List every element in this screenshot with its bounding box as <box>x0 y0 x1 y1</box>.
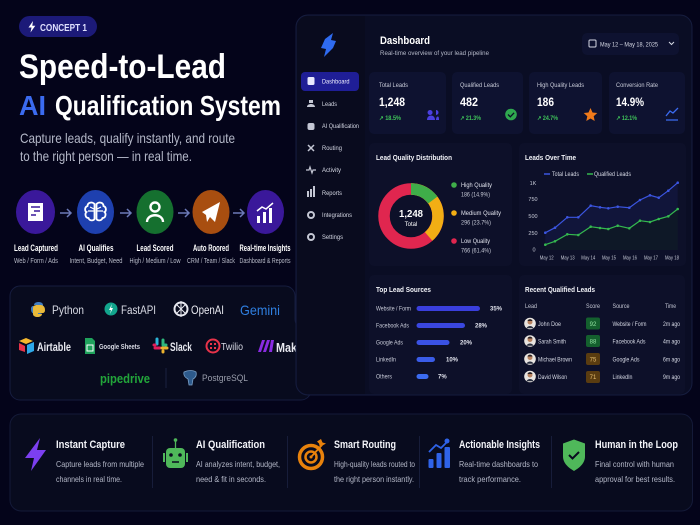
table header: Lead <box>525 304 537 310</box>
feature: instant capture: Capture leads from multiple <box>56 459 144 469</box>
table header: Time <box>665 304 677 310</box>
panel: lead quality distribution: Lead Quality Distribution <box>376 153 452 162</box>
feature: actionable insights: track performance. <box>459 474 521 484</box>
step: lead scored: High / Medium / Low <box>130 256 181 265</box>
stat card: qualified leads: Qualified Leads <box>460 82 499 89</box>
nav: dashboard <box>301 72 359 91</box>
table header: Score <box>586 304 601 310</box>
row: john doe: 92 <box>590 322 597 328</box>
feature: smart routing: the right person instantly. <box>334 474 414 484</box>
chart legend: Qualified Leads <box>594 172 631 178</box>
row: david wilson: LinkedIn <box>612 375 632 381</box>
row: john doe: 2m ago <box>663 322 681 328</box>
row: sarah smith: 4m ago <box>663 340 681 346</box>
legend: medium quality: Medium Quality <box>461 211 501 217</box>
feature: instant capture: Instant Capture <box>56 439 125 451</box>
panel: features <box>10 414 692 511</box>
arrow <box>60 209 71 217</box>
panel: tech stack <box>10 286 311 400</box>
logo: make: Make <box>276 341 303 355</box>
row: david wilson <box>524 371 681 383</box>
badge: concept 1 <box>19 16 97 37</box>
panel: dashboard <box>296 15 692 395</box>
nav: ai qualification <box>308 123 359 130</box>
line chart: May 15 <box>602 256 616 262</box>
nav: reports <box>307 186 342 197</box>
row: sarah smith <box>524 335 681 347</box>
title: Speed-to-Lead <box>19 48 226 86</box>
legend: medium quality <box>451 210 501 226</box>
bar: website / form: Website / Form <box>376 306 411 312</box>
legend: high quality <box>451 182 492 198</box>
stat card: conversion rate: ↗ 12.1% <box>616 116 638 122</box>
stat card: total leads: Total Leads <box>379 82 408 89</box>
nav: leads: Leads <box>322 102 337 108</box>
nav: leads <box>307 100 337 108</box>
bar: google ads: 20% <box>460 340 473 346</box>
subtitle: to the right person — in real time. <box>20 148 192 164</box>
nav: settings: Settings <box>322 235 343 241</box>
logo: pipedrive: pipedrive <box>100 371 150 386</box>
stat card: total leads: 1,248 <box>379 95 405 109</box>
line chart <box>528 181 679 262</box>
chart legend <box>544 172 631 178</box>
stat card: high quality leads: ↗ 24.7% <box>537 116 559 122</box>
nav: routing: Routing <box>322 146 342 152</box>
step: lead captured: Lead Captured <box>14 243 58 253</box>
legend: high quality: 186 (14.9%) <box>461 192 490 198</box>
bar: facebook ads <box>376 323 488 330</box>
bar: others: Others <box>376 374 392 380</box>
line chart: May 18 <box>665 256 679 262</box>
nav: dashboard: Dashboard <box>322 80 350 86</box>
logo: python <box>31 302 84 317</box>
row: michael brown <box>524 353 681 365</box>
line chart: May 14 <box>581 256 595 262</box>
donut chart: 1,248 <box>399 208 423 220</box>
title <box>19 48 281 121</box>
legend: medium quality: 296 (23.7%) <box>461 220 491 226</box>
legend: low quality: 766 (61.4%) <box>461 248 491 254</box>
row: sarah smith: Sarah Smith <box>538 340 566 346</box>
line chart: 250 <box>528 231 538 237</box>
panel: leads over time: Leads Over Time <box>525 153 576 162</box>
line chart: 0 <box>532 248 536 254</box>
sidebar logo <box>321 33 336 57</box>
step: ai qualifies: Intent, Budget, Need <box>70 256 122 265</box>
step: real-time insights <box>240 190 291 265</box>
bar: others: 7% <box>438 374 447 380</box>
feature: smart routing <box>300 439 415 484</box>
logo: twilio <box>206 340 243 353</box>
feature: ai qualification <box>163 438 280 484</box>
panel: top lead sources: Top Lead Sources <box>376 285 431 294</box>
dashboard header: Dashboard <box>380 35 430 47</box>
step: ai qualifies <box>70 190 122 265</box>
line chart: May 12 <box>540 256 554 262</box>
nav: routing <box>308 145 342 152</box>
row: john doe <box>524 318 681 330</box>
stat card: high quality leads: 186 <box>537 95 554 109</box>
step: auto routed: Auto Roored <box>193 243 229 253</box>
arrow <box>120 209 131 217</box>
logo: postgresql: PostgreSQL <box>202 373 248 384</box>
table header <box>525 304 677 310</box>
bar: website / form <box>376 306 503 312</box>
nav: ai qualification: AI Qualification <box>322 124 359 130</box>
logo: google sheets <box>85 338 140 354</box>
chart legend: Total Leads <box>552 172 579 178</box>
row: david wilson: 71 <box>590 375 597 381</box>
row: michael brown: 75 <box>590 358 597 364</box>
bar: linkedin: 10% <box>446 358 459 364</box>
dashboard header <box>380 35 489 57</box>
bar: facebook ads: 28% <box>475 324 488 330</box>
line chart: 750 <box>528 197 538 203</box>
line chart: May 16 <box>623 256 637 262</box>
donut chart <box>384 189 438 243</box>
feature: ai qualification: AI Qualification <box>196 439 265 451</box>
logo: python: Python <box>52 303 84 317</box>
line chart: 500 <box>528 214 538 220</box>
line chart: May 17 <box>644 256 658 262</box>
step: auto routed: CRM / Team / Slack <box>187 256 235 265</box>
row: david wilson: 9m ago <box>663 375 681 381</box>
nav: integrations <box>308 212 352 219</box>
nav: reports: Reports <box>322 191 342 197</box>
step: ai qualifies: AI Qualifies <box>78 243 114 253</box>
feature: smart routing: Smart Routing <box>334 439 396 451</box>
panel: leads over time <box>519 143 686 266</box>
step: real-time insights: Dashboard & Reports <box>240 256 291 265</box>
legend: low quality <box>451 238 491 254</box>
stat card: qualified leads: ↗ 21.3% <box>460 116 482 122</box>
process flow <box>14 190 291 265</box>
feature: instant capture: channels in real time. <box>56 474 122 484</box>
row: michael brown: Google Ads <box>612 358 640 364</box>
bar: linkedin <box>376 357 459 364</box>
logo: gemini: Gemini <box>240 302 280 318</box>
logo: openai <box>174 301 224 317</box>
bar: linkedin: LinkedIn <box>376 358 396 364</box>
stat card: conversion rate: 14.9% <box>616 95 644 109</box>
feature: ai qualification: AI analyzes intent, budget, <box>196 459 280 469</box>
feature: human in the loop: Final control with human <box>595 459 674 469</box>
feature: actionable insights: Actionable Insights <box>459 439 540 451</box>
bar: others <box>376 374 447 380</box>
feature: actionable insights <box>428 438 540 484</box>
logo: fastapi: FastAPI <box>121 305 156 317</box>
nav: settings <box>308 234 343 241</box>
step: lead captured: Web / Form / Ads <box>14 256 58 265</box>
badge: concept 1: CONCEPT 1 <box>40 23 87 34</box>
feature: smart routing: High-quality leads routed to <box>334 459 415 469</box>
step: lead scored <box>130 190 181 265</box>
bar: google ads: Google Ads <box>376 340 403 346</box>
panel: recent qualified leads: Recent Qualified Leads <box>525 285 595 294</box>
panel: lead quality distribution <box>369 143 512 266</box>
step: real-time insights: Real-time Insights <box>240 243 290 253</box>
logo: airtable: Airtable <box>37 342 71 354</box>
row: sarah smith: Facebook Ads <box>612 340 646 346</box>
row: sarah smith: 88 <box>590 340 597 346</box>
stat card: total leads <box>369 72 446 134</box>
bar: facebook ads: Facebook Ads <box>376 324 409 330</box>
nav: integrations: Integrations <box>322 213 352 219</box>
logo: airtable <box>19 338 71 354</box>
step: auto routed <box>187 190 235 265</box>
date picker: May 12 – May 18, 2025 <box>600 42 658 48</box>
line chart: 1K <box>530 181 537 187</box>
feature: actionable insights: Real-time dashboards to <box>459 459 538 469</box>
step: lead captured <box>14 190 58 265</box>
row: michael brown: Michael Brown <box>538 358 572 364</box>
line chart: May 13 <box>561 256 575 262</box>
arrow <box>233 209 244 217</box>
legend: low quality: Low Quality <box>461 239 490 245</box>
logo: fastapi <box>104 302 156 317</box>
feature: ai qualification: need & fit in seconds. <box>196 474 266 484</box>
row: john doe: Website / Form <box>612 322 646 328</box>
donut chart: Total <box>405 222 417 228</box>
dashboard header: Real-time overview of your lead pipeline <box>380 50 489 57</box>
logo: google sheets: Google Sheets <box>99 342 140 351</box>
subtitle: Capture leads, qualify instantly, and route <box>20 130 235 146</box>
row: david wilson: David Wilson <box>538 375 567 381</box>
row: john doe: John Doe <box>538 322 562 328</box>
stat card: high quality leads <box>529 72 602 134</box>
logo: postgresql <box>184 370 248 385</box>
date picker <box>582 33 679 55</box>
bar: website / form: 35% <box>490 306 503 312</box>
logo: make <box>258 340 303 355</box>
feature: instant capture <box>25 438 144 484</box>
logo: slack: Slack <box>170 342 192 354</box>
feature: human in the loop: approval for best results. <box>595 474 675 484</box>
panel: recent qualified leads <box>519 275 685 394</box>
subtitle <box>20 130 235 164</box>
table header: Source <box>612 304 630 310</box>
legend: high quality: High Quality <box>461 183 492 189</box>
stat card: high quality leads: High Quality Leads <box>537 82 584 89</box>
stat card: conversion rate <box>609 72 685 134</box>
stat card: total leads: ↗ 18.5% <box>379 116 402 122</box>
nav: activity <box>306 167 341 174</box>
step: lead scored: Lead Scored <box>136 243 174 253</box>
logo: openai: OpenAI <box>191 305 224 317</box>
stat card: qualified leads: 482 <box>460 95 478 109</box>
stat card: qualified leads <box>452 72 523 134</box>
title: AI <box>19 90 46 121</box>
feature: human in the loop <box>563 439 678 484</box>
stat card: conversion rate: Conversion Rate <box>616 82 659 89</box>
panel: top lead sources <box>369 275 512 394</box>
title: Qualification System <box>55 90 281 121</box>
nav: activity: Activity <box>322 168 341 174</box>
row: michael brown: 6m ago <box>663 358 681 364</box>
arrow <box>178 209 189 217</box>
bar: google ads <box>376 340 473 346</box>
feature: human in the loop: Human in the Loop <box>595 439 678 451</box>
logo: twilio: Twilio <box>221 342 243 353</box>
logo: slack <box>154 339 192 354</box>
